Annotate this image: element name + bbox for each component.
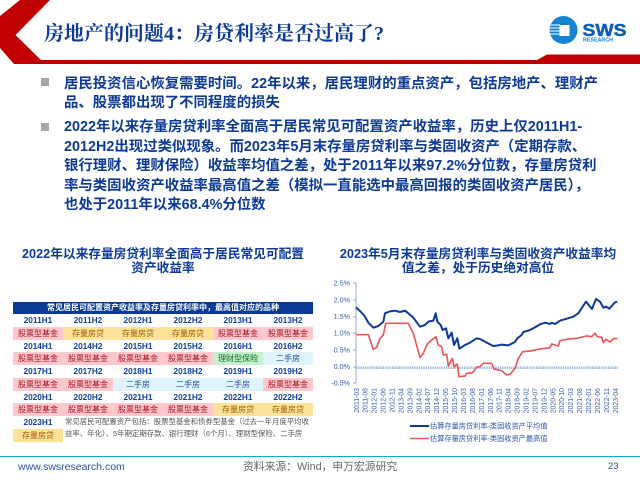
table header: 常见居民可配置资产收益率及存量房贷利率中，最高值对应的品种 [47, 303, 279, 312]
x axis labels: 2013-09 [407, 388, 414, 413]
table: best performing asset by half-year: 股票型基金 [18, 405, 58, 414]
table: best performing asset by half-year: 2013H2 [273, 315, 303, 325]
table: best performing asset by half-year: 股票型基金 [118, 354, 158, 363]
header band: red chevron and rule [0, 0, 640, 64]
table: best performing asset by half-year: 存量房贷 [22, 431, 54, 440]
y axis: -0.5% [331, 378, 351, 388]
table: best performing asset by half-year: 二手房 [226, 380, 250, 389]
x axis labels: 2015-05 [443, 388, 450, 413]
table: best performing asset by half-year: 股票型基金 [68, 354, 108, 363]
table: best performing asset by half-year: 2022H2 [273, 392, 303, 402]
x axis labels: 2022-06 [595, 388, 602, 413]
table: best performing asset by half-year: 2016H1 [223, 341, 253, 351]
x axis labels: 2021-03 [568, 388, 575, 413]
table note: 常见居民可配置资产包括：股票型基金和债券型基金（过去一年月度平均收 [65, 417, 309, 426]
x axis labels [354, 388, 620, 413]
x axis labels: 2016-03 [461, 388, 468, 413]
table: best performing asset by half-year: 2016H2 [273, 341, 303, 351]
table: best performing asset by half-year: 2019H1 [223, 366, 253, 376]
y axis: 2.5% [334, 278, 351, 288]
table: best performing asset by half-year: 2012H1 [123, 315, 153, 325]
x axis labels: 2012-01 [372, 388, 379, 413]
left chart heading: 2022年以来存量房贷利率全面高于居民常见可配置 [22, 247, 304, 261]
table: best performing asset by half-year: 股票型基金 [18, 329, 58, 338]
bullet 2 text: 率与类固收资产收益率最高值之差（模拟一直能选中最高回报的类固收资产居民）， [64, 178, 589, 194]
x axis labels: 2022-11 [604, 388, 611, 413]
y axis [331, 278, 356, 388]
table header [13, 302, 313, 314]
table: best performing asset by half-year: 2015H1 [123, 341, 153, 351]
bullet 2 text: 2012H2出现过类似现象。而2023年5月末存量房贷利率与类固收资产（定期存款、 [64, 138, 586, 154]
x axis labels: 2018-09 [515, 388, 522, 413]
x axis labels: 2014-02 [416, 388, 423, 413]
x axis labels: 2017-01 [479, 388, 486, 413]
x axis labels: 2018-04 [506, 388, 513, 413]
right chart heading: 2023年5月末存量房贷利率与类固收资产收益率均 [340, 247, 616, 261]
table note [65, 417, 309, 438]
x axis labels: 2015-10 [452, 388, 459, 413]
footer website: www.swsresearch.com [18, 461, 125, 473]
table: best performing asset by half-year: 2023H1 [23, 417, 53, 427]
y axis: 2.0% [334, 296, 351, 304]
x axis labels: 2022-01 [586, 388, 593, 413]
table note: 益率、年化）、5年期定期存款、银行理财（6个月）、理财型保险、二手房 [65, 429, 302, 438]
x axis labels: 2017-06 [488, 388, 495, 413]
x axis labels: 2019-12 [541, 388, 548, 413]
table: best performing asset by half-year: 股票型基金 [268, 380, 308, 389]
table: best performing asset by half-year [13, 302, 313, 442]
table: best performing asset by half-year: 股票型基金 [168, 354, 208, 363]
table: best performing asset by half-year: 股票型基金 [168, 405, 208, 414]
line chart: mortgage rate spread [331, 278, 620, 443]
table: best performing asset by half-year: 存量房贷 [72, 329, 104, 338]
table: best performing asset by half-year: 2020H2 [73, 392, 103, 402]
series: spread to average [356, 299, 617, 349]
logo: SWS Research: RESEARCH [583, 38, 613, 44]
table: best performing asset by half-year: 股票型基金 [68, 405, 108, 414]
table: best performing asset by half-year: 2020H1 [23, 392, 53, 402]
logo: SWS Research [550, 16, 626, 44]
y axis: 0.0% [334, 362, 351, 371]
x axis labels: 2019-07 [532, 388, 539, 413]
table: best performing asset by half-year: 股票型基金 [18, 380, 58, 389]
x axis labels: 2017-11 [497, 388, 504, 413]
right chart heading [340, 247, 616, 275]
table: best performing asset by half-year: 二手房 [276, 354, 300, 363]
left chart heading [22, 247, 304, 275]
bullet 2 text [64, 118, 597, 213]
table: best performing asset by half-year: 股票型基金 [268, 329, 308, 338]
table: best performing asset by half-year: 存量房贷 [172, 329, 204, 338]
table: best performing asset by half-year: 股票型基金 [118, 405, 158, 414]
page number: 23 [608, 461, 619, 472]
x axis labels: 2012-11 [390, 388, 396, 413]
table: best performing asset by half-year: 2011H2 [74, 315, 102, 325]
legend [410, 422, 547, 443]
x axis labels: 2013-04 [398, 388, 405, 413]
legend: 估算存量房贷利率-类固收资产平均值 [430, 422, 547, 430]
table: best performing asset by half-year: 二手房 [176, 380, 200, 389]
bullet marker 1 [41, 78, 49, 86]
table: best performing asset by half-year: 2022H1 [223, 392, 253, 402]
table: best performing asset by half-year: 存量房贷 [122, 329, 154, 338]
table: best performing asset by half-year: 2014H1 [23, 341, 53, 351]
y axis: 0.5% [334, 346, 351, 354]
x axis labels: 2020-10 [559, 388, 566, 413]
bullet 1 text [64, 76, 598, 111]
source note: 资料来源：Wind，申万宏源研究 [243, 461, 397, 473]
x axis labels: 2011-08 [363, 388, 370, 413]
left chart heading: 资产收益率 [131, 261, 195, 275]
table: best performing asset by half-year: 理财型保险 [218, 354, 258, 363]
table: best performing asset by half-year: 股票型基金 [18, 354, 58, 363]
table: best performing asset by half-year: 2021H1 [123, 392, 153, 402]
table: best performing asset by half-year: 2021H2 [173, 392, 203, 402]
title: 房地产的问题4：房贷利率是否过高了? [44, 23, 384, 45]
x axis labels: 2023-04 [613, 388, 620, 413]
table: best performing asset by half-year: 2019H2 [273, 366, 303, 376]
bullet 2 text: 也处于2011年以来68.4%分位数 [64, 197, 266, 213]
table: best performing asset by half-year: 存量房贷 [222, 405, 254, 414]
y axis: 1.0% [334, 328, 351, 338]
table: best performing asset by half-year: 2018H2 [173, 366, 203, 376]
table: best performing asset by half-year: 存量房贷 [272, 405, 304, 414]
x axis labels: 2012-06 [381, 388, 388, 413]
bullet 1 text: 品、股票都出现了不同程度的损失 [64, 95, 280, 111]
bullet 2 text: 银行理财、理财保险）收益率均值之差，处于2011年以来97.2%分位数，存量房贷利 [64, 158, 597, 174]
y axis: 1.5% [334, 312, 351, 321]
footer rule [0, 456, 640, 457]
zero line with ticks [356, 367, 618, 369]
x axis labels: 2014-12 [434, 388, 441, 413]
bullet marker 2 [41, 123, 49, 131]
table: best performing asset by half-year: 2011H1 [24, 315, 52, 325]
table: best performing asset by half-year: 2017H2 [73, 366, 103, 376]
x axis labels: 2019-02 [524, 388, 530, 413]
table: best performing asset by half-year: 2015H2 [173, 341, 203, 351]
table: best performing asset by half-year: 股票型基金 [218, 329, 258, 338]
table: best performing asset by half-year: 股票型基金 [68, 380, 108, 389]
right chart heading: 值之差，处于历史绝对高位 [402, 261, 554, 275]
x axis labels: 2020-05 [550, 388, 557, 413]
x axis labels: 2011-03 [354, 388, 361, 413]
x axis labels: 2014-07 [425, 388, 432, 413]
table: best performing asset by half-year: 2017H1 [23, 366, 53, 376]
bullet 2 [41, 118, 597, 213]
legend: 估算存量房贷利率-类固收资产最高值 [430, 434, 547, 443]
bullet 2 text: 2022年以来存量房贷利率全面高于居民常见可配置资产收益率，历史上仅2011H1- [64, 119, 582, 135]
table: best performing asset by half-year: 二手房 [126, 380, 150, 389]
table: best performing asset by half-year: 2013H1 [223, 315, 253, 325]
logo: SWS Research: SWS [582, 20, 626, 40]
table: best performing asset by half-year: 2014H2 [73, 341, 103, 351]
x axis labels: 2016-08 [470, 388, 477, 413]
x axis labels: 2021-08 [577, 388, 584, 413]
table: best performing asset by half-year: 2018H1 [123, 366, 153, 376]
bullet 1 [41, 76, 598, 111]
table: best performing asset by half-year: 2012H2 [173, 315, 203, 325]
series: spread to maximum [356, 323, 617, 377]
bullet 1 text: 居民投资信心恢复需要时间。22年以来，居民理财的重点资产，包括房地产、理财产 [64, 76, 598, 92]
